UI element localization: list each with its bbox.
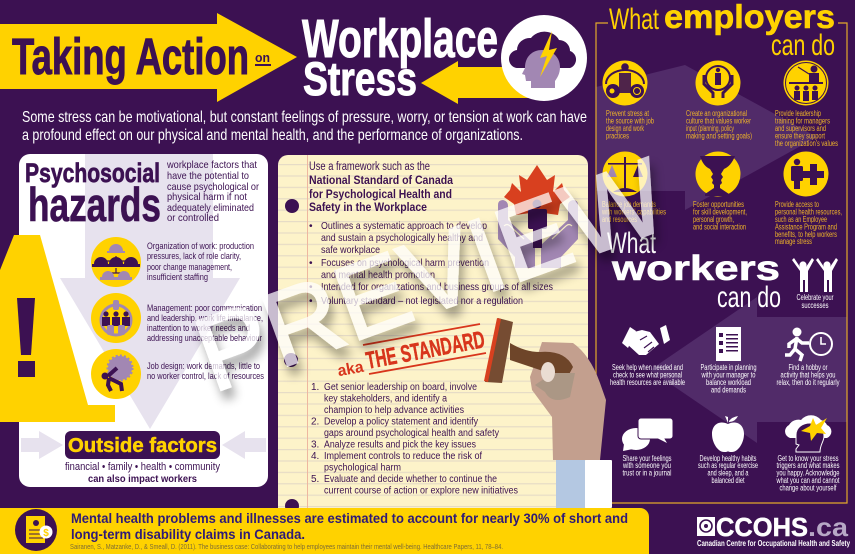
icon: management bbox=[91, 293, 141, 343]
text: job design: Job design: work demands, little to bbox=[147, 361, 260, 372]
text: prevent stress bbox=[606, 109, 654, 140]
text: find a hobby: activity that helps you bbox=[780, 370, 836, 380]
numbered list: gaps around psychological health and safety bbox=[324, 428, 499, 439]
text: celebrate: Celebrate your bbox=[796, 293, 834, 302]
text: job design: no worker control, lack of resources bbox=[147, 371, 264, 382]
title: Workplace Stress bbox=[302, 9, 498, 105]
text: personal health resources: manage stress bbox=[775, 237, 812, 246]
title banner: Taking Action on: Taking Action bbox=[12, 28, 249, 85]
text: leadership training bbox=[775, 109, 838, 148]
text: participate in planning: with your manager to bbox=[701, 370, 756, 380]
heading: Psychosocial hazards: Psychosocial bbox=[25, 158, 160, 188]
text: leadership training: training for managers bbox=[775, 116, 830, 126]
definition text: or controlled bbox=[167, 212, 219, 224]
text: find a hobby: Find a hobby or bbox=[788, 363, 828, 372]
numbered list: psychological harm bbox=[324, 462, 401, 474]
numbered list: Implement controls to reduce the risk of bbox=[324, 451, 482, 462]
text: develop healthy habits bbox=[698, 454, 758, 485]
icon: handshake bbox=[622, 325, 670, 355]
text: prevent stress: practices bbox=[606, 132, 629, 140]
text: leadership training: Provide leadership bbox=[775, 109, 821, 118]
numbered list: 4. bbox=[311, 451, 319, 462]
text: develop healthy habits: Develop healthy habits bbox=[700, 454, 756, 463]
icon: job design gears bbox=[602, 60, 648, 106]
text: organizational culture: input (planning, policy bbox=[686, 124, 734, 133]
panel: notebook page bbox=[278, 155, 588, 513]
panel: psychosocial hazards bbox=[0, 154, 268, 487]
text: develop healthy habits: such as regular exercise bbox=[698, 461, 758, 470]
text: balance job demands: and resources bbox=[602, 215, 637, 224]
text: leadership training: and supervisors and bbox=[775, 124, 826, 133]
text: management bbox=[147, 303, 263, 344]
text: job design bbox=[147, 361, 264, 382]
text: seek help: health resources are available bbox=[610, 378, 685, 387]
text: foster opportunities: and social interaction bbox=[693, 222, 746, 232]
text: celebrate: successes bbox=[802, 301, 828, 310]
text: get to know your stress triggers bbox=[776, 454, 840, 492]
text: organization of work bbox=[147, 241, 254, 283]
text: organizational culture: Create an organizational bbox=[686, 109, 747, 118]
title: Workplace Stress: Workplace bbox=[302, 9, 498, 69]
illustration: hand holding stamp bbox=[484, 318, 612, 508]
citation: Sairanen, S., Matzanke, D., & Smeall, D. (2011). The business case: Collaborating to help employees maintain their mental well-being. Healthcare Papers, 11, 78–84. bbox=[70, 542, 503, 551]
definition text: workplace factors that bbox=[166, 159, 257, 171]
bullet list: • bbox=[309, 296, 313, 307]
icon: leadership training bbox=[784, 60, 828, 106]
text: foster opportunities: Foster opportunities bbox=[693, 200, 744, 209]
definition text: physical harm if not bbox=[167, 191, 247, 203]
text: participate in planning: Participate in planning bbox=[700, 363, 756, 372]
bullet list: • bbox=[309, 221, 313, 232]
text: foster opportunities: for skill development, bbox=[693, 208, 747, 216]
bullet list: Focuses on psychological harm prevention bbox=[321, 258, 489, 269]
bullet list: safe workplace bbox=[321, 245, 380, 256]
heading: what workers can do: workers bbox=[611, 249, 780, 288]
icon: speech bubbles bbox=[622, 418, 673, 451]
text: personal health resources: such as an Employee bbox=[775, 215, 827, 224]
bullet list: • bbox=[309, 258, 313, 269]
text: personal health resources bbox=[775, 200, 842, 246]
title: Workplace Stress: Stress bbox=[303, 52, 417, 105]
numbered list bbox=[311, 382, 518, 496]
numbered list: Evaluate and decide whether to continue the bbox=[324, 474, 497, 485]
definition text: cause psychological or bbox=[167, 181, 259, 193]
footer statistic: long-term disability claims in Canada. bbox=[71, 526, 305, 542]
footer statistic bbox=[71, 510, 628, 542]
text: share your feelings: Share your feelings bbox=[622, 454, 672, 463]
CCOHS logo: CCOHS bbox=[716, 512, 808, 542]
text: organization of work: insufficient staffing bbox=[147, 272, 208, 283]
text: organization of work: Organization of work: production bbox=[147, 241, 254, 252]
footer statistic: Mental health problems and illnesses are estimated to account for nearly 30% of short and bbox=[71, 510, 628, 526]
text: foster opportunities: personal growth, bbox=[693, 215, 734, 224]
icon: faces and vase bbox=[696, 152, 740, 196]
stamp text: aka the standard bbox=[334, 324, 487, 380]
text: balance job demands: with workers' capabilities bbox=[601, 208, 666, 216]
icon: job design bbox=[91, 349, 141, 399]
text: seek help: Seek help when needed and bbox=[612, 363, 683, 372]
warning sign bbox=[0, 235, 115, 422]
watermark: PREVIEW: PREVIEW bbox=[181, 136, 681, 415]
text: organizational culture: culture that values worker bbox=[686, 116, 751, 126]
icon: balance scale bbox=[602, 152, 648, 196]
heading: national standard: for Psychological Health and bbox=[309, 189, 452, 201]
text: management: inattention to worker needs and bbox=[147, 323, 250, 334]
CCOHS logo: .ca bbox=[808, 512, 849, 542]
text: prevent stress: the source with job bbox=[606, 116, 654, 126]
outside factors box: Outside factors bbox=[68, 435, 217, 457]
icon: stressed head under cloud bbox=[501, 15, 587, 101]
bullet list: • bbox=[309, 282, 313, 293]
text: organization of work: poor change management, bbox=[147, 262, 232, 273]
heading: what workers can do bbox=[607, 227, 781, 314]
text: participate in planning: and demands bbox=[711, 386, 746, 394]
text: seek help bbox=[610, 363, 685, 387]
text: develop healthy habits: balanced diet bbox=[712, 476, 745, 485]
heading: Psychosocial hazards bbox=[25, 158, 161, 231]
definition text: adequately eliminated bbox=[167, 202, 254, 214]
outside factors text: can also impact workers bbox=[88, 474, 197, 485]
text: share your feelings: with someone you bbox=[622, 461, 671, 470]
bullet list: and sustain a psychologically healthy and bbox=[321, 233, 483, 244]
heading: Psychosocial hazards: hazards bbox=[28, 178, 161, 231]
intro text: Some stress can be motivational, but constant feelings of pressure, worry, or tension at work can have bbox=[22, 109, 587, 126]
numbered list: 3. bbox=[311, 440, 319, 450]
text: share your feelings bbox=[622, 454, 672, 478]
icon: person and health cross bbox=[784, 152, 828, 196]
numbered list: 2. bbox=[311, 416, 319, 428]
outside factors text: financial • family • health • community bbox=[65, 461, 220, 473]
title banner: Taking Action on bbox=[0, 13, 297, 102]
bullet list: and mental health promotion bbox=[321, 270, 435, 281]
heading: national standard: National Standard of Canada bbox=[309, 175, 454, 187]
bullet list: Intended for organizations and business groups of all sizes bbox=[321, 282, 553, 293]
stamp text: aka the standard: aka bbox=[336, 359, 365, 380]
panel: right column arrows and frame bbox=[596, 23, 847, 503]
icon: maple leaf and hands bbox=[498, 165, 578, 268]
icon: disability claim bbox=[15, 509, 57, 551]
bullet list: Outlines a systematic approach to develop bbox=[321, 221, 487, 232]
icon: cloud, head and burst bbox=[785, 415, 831, 452]
text: prevent stress: Prevent stress at bbox=[606, 109, 650, 118]
text: prevent stress: design and work bbox=[606, 124, 645, 133]
footer bar bbox=[0, 508, 649, 554]
CCOHS logo bbox=[697, 512, 850, 548]
icon: caring hands bbox=[696, 60, 740, 106]
numbered list: key stakeholders, and identify a bbox=[324, 394, 447, 404]
text: develop healthy habits: and sleep, and a bbox=[708, 468, 749, 478]
numbered list: current course of action or explore new initiatives bbox=[324, 486, 518, 496]
bullet list: Voluntary standard – not legislated nor a regulation bbox=[321, 296, 523, 307]
icon: disability claim: $ bbox=[43, 528, 49, 539]
stamp text: aka the standard: THE STANDARD bbox=[364, 326, 487, 375]
numbered list: Get senior leadership on board, involve bbox=[324, 382, 477, 393]
text: participate in planning bbox=[700, 363, 756, 394]
text: personal health resources: Provide access to bbox=[775, 200, 819, 209]
pale downward arrow bbox=[60, 154, 240, 429]
icon: checklist bbox=[716, 327, 741, 361]
numbered list: 5. bbox=[311, 474, 319, 485]
icon: celebrating people bbox=[792, 258, 838, 292]
bullet list bbox=[309, 221, 553, 307]
heading: what employers can do bbox=[609, 0, 835, 62]
icon: organization of work bbox=[91, 237, 141, 287]
text: management: and leadership, work life imbalance, bbox=[147, 313, 263, 324]
heading: what workers can do: What bbox=[607, 227, 656, 260]
text: balance job demands bbox=[601, 200, 666, 224]
text: participate in planning: balance workload bbox=[706, 378, 751, 387]
text: organization of work: pressures, lack of role clarity, bbox=[147, 251, 241, 262]
text: management: addressing unacceptable behaviour bbox=[147, 333, 262, 344]
heading: national standard: Safety in the Workplace bbox=[309, 202, 427, 214]
intro text bbox=[22, 109, 587, 144]
text: foster opportunities bbox=[693, 200, 747, 232]
numbered list: Develop a policy statement and identify bbox=[324, 416, 478, 428]
text: organizational culture: making and setting goals) bbox=[686, 132, 752, 140]
text: seek help: check to see what personal bbox=[613, 370, 682, 380]
text: share your feelings: trust or in a journal bbox=[622, 468, 672, 478]
title banner: Taking Action on: on bbox=[255, 50, 270, 65]
text: management: Management: poor communication bbox=[147, 303, 262, 314]
heading: what workers can do: can do bbox=[717, 281, 781, 314]
definition text bbox=[166, 159, 259, 224]
arrow pointing to Stress bbox=[421, 61, 540, 104]
text: organizational culture bbox=[686, 109, 752, 140]
icon: runner and clock bbox=[785, 328, 832, 361]
text: find a hobby bbox=[776, 363, 840, 387]
numbered list: champion to help advance activities bbox=[324, 405, 464, 416]
icon: apple bbox=[712, 416, 744, 452]
text: celebrate bbox=[796, 293, 834, 310]
numbered list: Analyze results and pick the key issues bbox=[324, 440, 476, 450]
numbered list: 1. bbox=[311, 382, 319, 393]
outside factors text bbox=[65, 461, 220, 485]
intro text: a profound effect on our physical and mental health, and the performance of organizations. bbox=[22, 127, 523, 144]
heading: national standard: Use a framework such as the bbox=[309, 161, 430, 173]
definition text: have the potential to bbox=[167, 170, 249, 182]
arrows toward outside factors bbox=[21, 431, 266, 459]
heading: what employers can do: What bbox=[609, 3, 659, 36]
heading: national standard bbox=[309, 161, 454, 214]
text: leadership training: ensure they support bbox=[775, 132, 826, 140]
text: balance job demands: Balance job demands bbox=[602, 200, 656, 209]
